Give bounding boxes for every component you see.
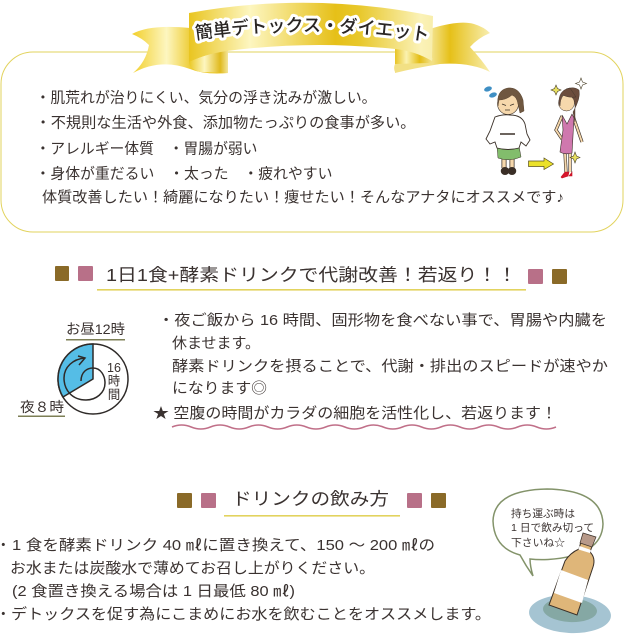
label: 16 hours: 時 [108, 374, 121, 388]
text block: instructions [0, 537, 491, 623]
label: 16 hours: 間 [108, 388, 120, 402]
heading: how to drink [177, 489, 446, 517]
illustration: wine bottle with speech bubble: 1 日で飲み切って [511, 521, 594, 534]
heading: section 1 with squares: 1日1食+酵素ドリンクで代謝改善！若返り！！ [106, 265, 517, 285]
text block: metabolism explanation: 休ませます。 [172, 335, 260, 352]
figure: before [486, 88, 530, 175]
intro text block: ・不規則な生活や外食、添加物たっぷりの食事が多い。 [36, 114, 416, 132]
label: 16 hours: 16 [107, 361, 121, 375]
text block: instructions: (2 食置き換える場合は 1 日最低 80 ㎖) [12, 583, 295, 600]
icon: puddle [528, 593, 612, 635]
figure: after [556, 88, 582, 178]
intro text block: 体質改善したい！綺麗になりたい！痩せたい！そんなアナタにオススメです♪ [42, 188, 564, 206]
icon: yellow arrow [528, 158, 554, 170]
intro text block [36, 90, 564, 206]
intro text block: ・アレルギー体質 ・胃腸が弱い [36, 140, 258, 158]
illustration: wine bottle with speech bubble [493, 489, 612, 635]
text block: metabolism explanation: になります◎ [172, 380, 267, 397]
text block: instructions: 1 食を酵素ドリンク 40 ㎖に置き換えて、150 ～ 200 ㎖の [12, 537, 435, 554]
illustration: wine bottle with speech bubble: 下さいね☆ [511, 537, 566, 549]
icon: sweat drops [483, 85, 498, 99]
icon: bottle [549, 534, 595, 615]
intro text block: ・肌荒れが治りにくい、気分の浮き沈みが激しい。 [36, 90, 376, 106]
label: noon: お昼12時 [66, 321, 125, 337]
callout: speech bubble [493, 489, 603, 576]
label: 16 hours [107, 361, 121, 402]
text block: instructions: デトックスを促す為にこまめにお水を飲むことをオススメします。 [11, 605, 491, 623]
panel: intro rounded box [1, 52, 623, 232]
text block: metabolism explanation: ★ 空腹の時間がカラダの細胞を活性化し、若返ります！ [153, 405, 557, 422]
heading: how to drink: ドリンクの飲み方 [232, 489, 389, 509]
text block: metabolism explanation: ・夜ご飯から 16 時間、固形物を食べない事で、胃腸や内臓を [158, 312, 607, 329]
illustration: wine bottle with speech bubble: 持ち運ぶ時は [511, 507, 575, 520]
text block: instructions: お水または炭酸水で薄めてお召し上がりください。 [10, 560, 375, 577]
ribbon title: 簡単デトックス・ダイエット [192, 14, 430, 44]
icon: sparkles [551, 78, 586, 163]
clock chart: 16 hour fast [18, 321, 128, 417]
text block: metabolism explanation [153, 312, 608, 422]
decorative wavy underline [172, 425, 556, 429]
text block: metabolism explanation: 酵素ドリンクを摂ることで、代謝・排出のスピードが速やか [172, 358, 608, 375]
label: night: 夜８時 [20, 399, 64, 415]
intro text block: ・身体が重だるい ・太った ・疲れやすい [36, 166, 332, 182]
ribbon banner [132, 2, 490, 74]
heading: section 1 with squares [55, 265, 567, 291]
illustration: before and after figures [483, 78, 586, 178]
